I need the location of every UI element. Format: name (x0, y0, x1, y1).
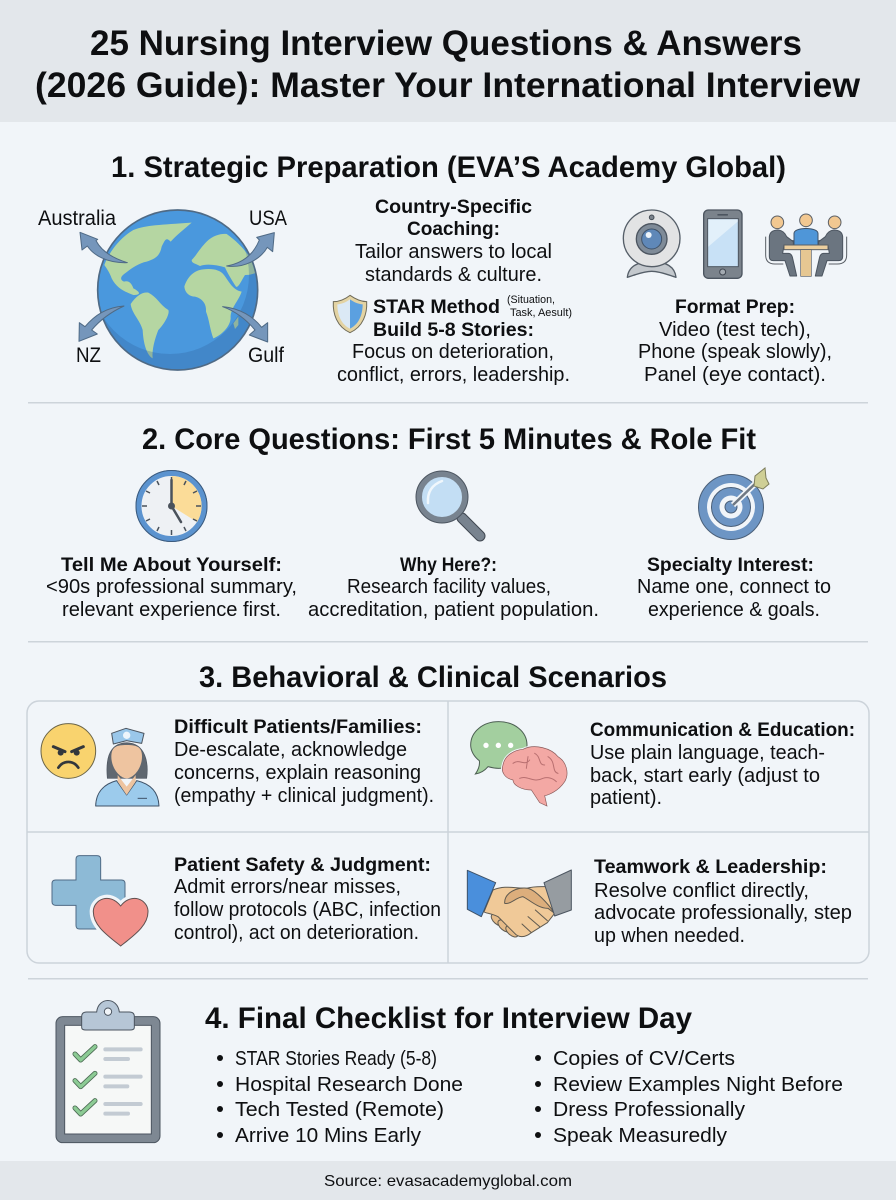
checklist: left column: STAR Stories Ready (5-8) (235, 1048, 437, 1070)
text: communication: patient). (590, 787, 662, 809)
text block: format prep: Format Prep: (675, 296, 795, 318)
checklist: left column: Hospital Research Done (235, 1074, 463, 1096)
checklist: right column: Copies of CV/Certs (553, 1048, 735, 1070)
text: teamwork: advocate professionally, step (594, 902, 852, 924)
footer: source (0, 1161, 896, 1200)
icon: panel interview (766, 214, 847, 276)
text block: format prep: Phone (speak slowly), (638, 341, 832, 363)
text block: STAR method: STAR Method (373, 296, 500, 318)
text block: tell me about yourself (46, 554, 297, 621)
text: patient safety: Patient Safety & Judgment: (174, 854, 431, 876)
icon: globe with arrows (38, 209, 287, 371)
text: communication: Communication & Education: (590, 719, 855, 741)
icon: clock (136, 470, 207, 542)
text: teamwork: Teamwork & Leadership: (594, 856, 827, 878)
text block: country-specific coaching: Tailor answers to local (355, 241, 552, 263)
checklist: right column: Dress Professionally (553, 1099, 745, 1121)
title banner (0, 0, 896, 122)
icon: globe with arrows: NZ (76, 344, 101, 367)
text block: why here: Research facility values, (347, 576, 551, 598)
icon: medical cross and heart (52, 856, 148, 946)
icon: angry face and nurse (41, 724, 159, 806)
icon: webcam (623, 210, 680, 277)
text: patient safety: Admit errors/near misses, (174, 876, 401, 898)
text block: specialty interest: Specialty Interest: (647, 554, 814, 576)
text block: tell me about yourself: <90s professional summary, (46, 576, 297, 598)
text block: why here: accreditation, patient population. (308, 599, 599, 621)
footer: source: Source: evasacademyglobal.com (324, 1173, 572, 1190)
checklist: right column: Speak Measuredly (553, 1125, 727, 1147)
title banner: 25 Nursing Interview Questions & Answers (90, 24, 802, 63)
text: difficult patients (174, 716, 434, 807)
text block: specialty interest: experience & goals. (648, 599, 820, 621)
text: teamwork: Resolve conflict directly, (594, 880, 809, 902)
icon: handshake (467, 870, 571, 939)
text block: format prep (638, 296, 832, 386)
text block: specialty interest: Name one, connect to (637, 576, 831, 598)
text block: STAR method: Task, Aesult) (510, 307, 572, 319)
icon: globe with arrows: USA (249, 207, 287, 230)
text block: STAR method (337, 294, 572, 386)
heading: section 3: 3. Behavioral & Clinical Scenarios (199, 661, 667, 694)
text: patient safety: control), act on deterioration. (174, 922, 419, 944)
text: difficult patients: De-escalate, acknowledge (174, 739, 407, 761)
text block: country-specific coaching: Country-Specific (375, 196, 532, 218)
text: teamwork (594, 856, 852, 947)
heading: section 2: 2. Core Questions: First 5 Minutes & Role Fit (142, 423, 756, 456)
icon: clipboard (56, 1000, 160, 1143)
heading: section 1: 1. Strategic Preparation (EVA’S Academy Global) (111, 151, 786, 184)
text block: STAR method: conflict, errors, leadership. (337, 364, 570, 386)
text block: why here: Why Here?: (400, 554, 497, 576)
text: communication: back, start early (adjust to (590, 765, 820, 787)
panel: scenarios grid (27, 701, 869, 963)
text: teamwork: up when needed. (594, 925, 745, 947)
checklist: right column (535, 1048, 843, 1147)
text block: tell me about yourself: Tell Me About Yourself: (61, 554, 282, 576)
heading: section 4: 4. Final Checklist for Interview Day (205, 1002, 692, 1035)
text block: STAR method: Focus on deterioration, (352, 341, 554, 363)
text: communication (590, 719, 855, 809)
text block: tell me about yourself: relevant experience first. (62, 599, 281, 621)
text block: why here (308, 554, 599, 621)
text: communication: Use plain language, teach- (590, 742, 825, 764)
text block: STAR method: Build 5-8 Stories: (373, 319, 534, 341)
icon: speech bubble and brain (471, 722, 567, 806)
text: difficult patients: concerns, explain reasoning (174, 762, 421, 784)
checklist: left column: Tech Tested (Remote) (235, 1099, 444, 1121)
text: patient safety: follow protocols (ABC, infection (174, 899, 441, 921)
title banner: (2026 Guide): Master Your International Interview (35, 66, 861, 105)
checklist: left column: Arrive 10 Mins Early (235, 1125, 421, 1147)
icon: target with arrow (698, 468, 769, 540)
icon: shield (333, 295, 367, 333)
checklist: left column (217, 1048, 463, 1147)
checklist: right column: Review Examples Night Before (553, 1074, 843, 1096)
text: difficult patients: (empathy + clinical judgment). (174, 785, 434, 807)
text block: format prep: Video (test tech), (659, 319, 811, 341)
text block: country-specific coaching: Coaching: (407, 218, 500, 240)
icon: magnifying glass (416, 471, 480, 536)
text block: format prep: Panel (eye contact). (644, 364, 826, 386)
icon: globe with arrows: Australia (38, 207, 116, 230)
text: difficult patients: Difficult Patients/Families: (174, 716, 422, 738)
icon: globe with arrows: Gulf (248, 344, 284, 367)
text block: specialty interest (637, 554, 831, 621)
text block: country-specific coaching: standards & culture. (365, 264, 542, 286)
icon: phone (704, 210, 742, 278)
text: patient safety (174, 854, 441, 944)
text block: STAR method: (Situation, (507, 294, 555, 306)
text block: country-specific coaching (355, 196, 552, 286)
